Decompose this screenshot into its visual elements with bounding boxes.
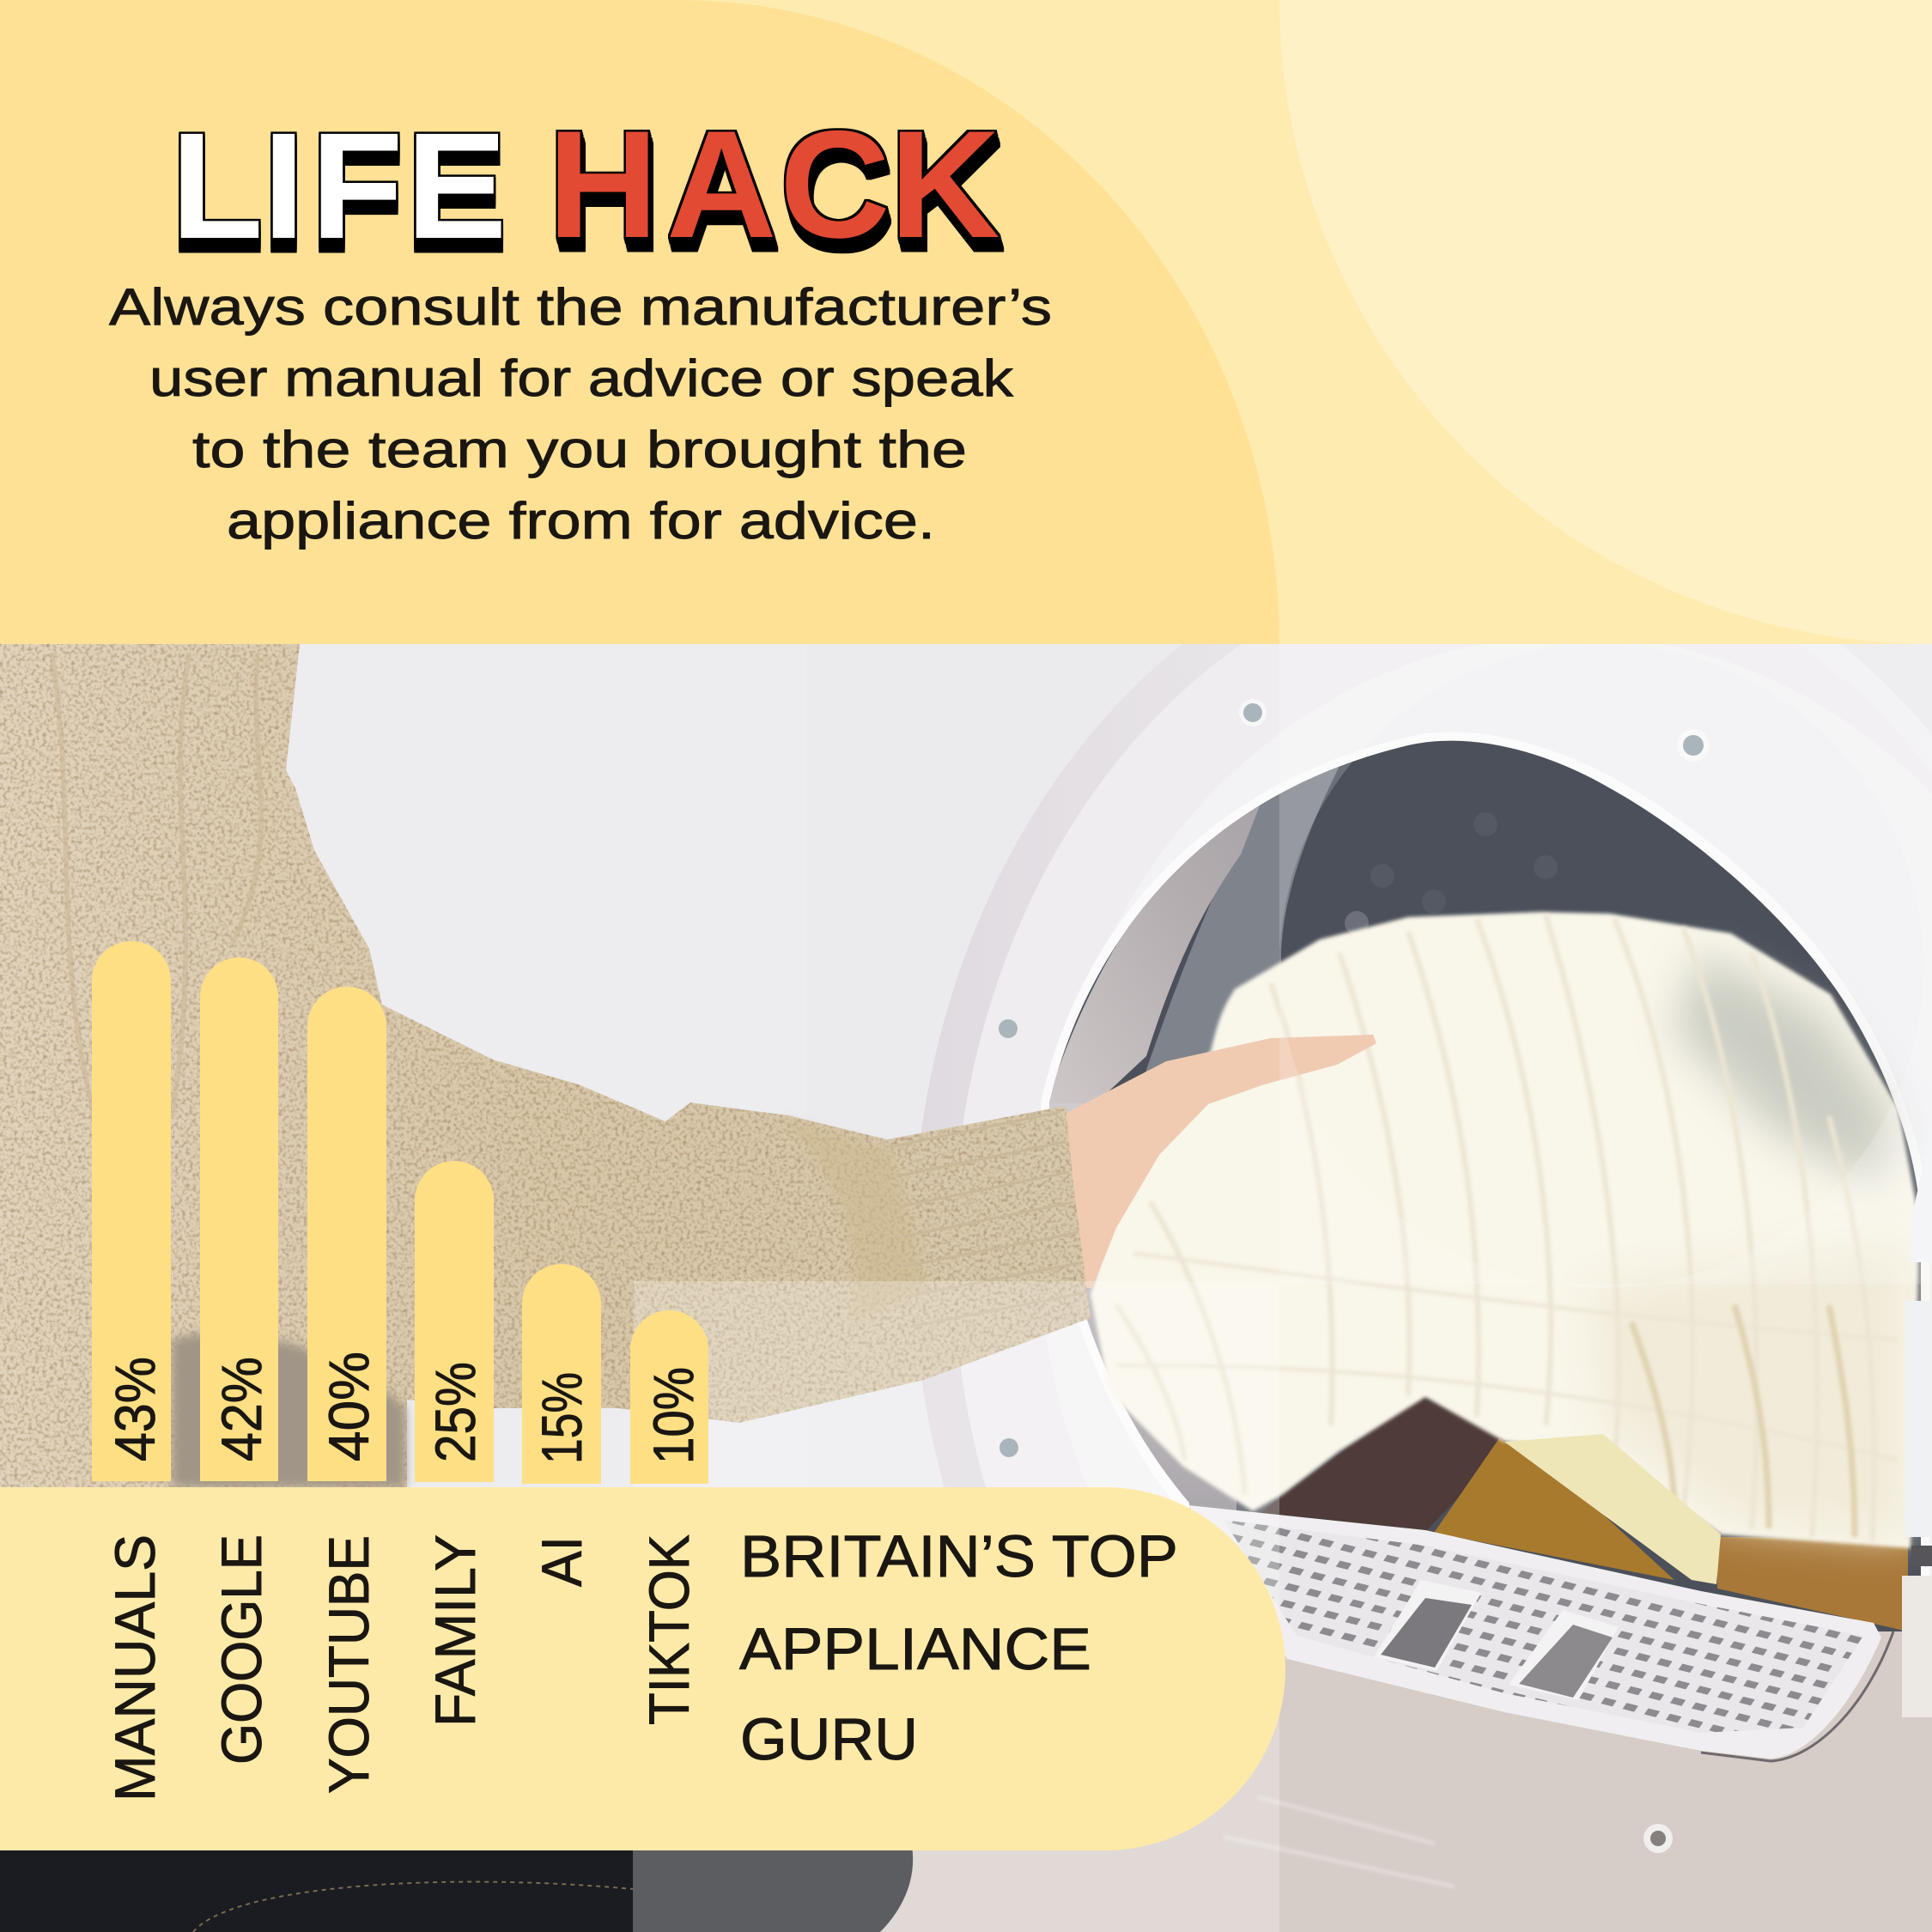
bar: youtube 40% xyxy=(307,987,386,1481)
heading: Britain's top appliance guru: APPLIANCE xyxy=(739,1616,1091,1682)
photo: pale yellow sleeve xyxy=(1504,1434,1721,1584)
title: LIFE HACK: HACK xyxy=(548,99,1000,270)
heading: Britain's top appliance guru: BRITAIN’S TOP xyxy=(740,1523,1178,1589)
text block: advice xyxy=(109,278,1052,550)
heading: Britain's top appliance guru xyxy=(739,1523,1178,1772)
photo: sweater sleeve and body xyxy=(0,644,1091,1487)
photo: drum interior xyxy=(1030,738,1921,1631)
bar: manuals 43% xyxy=(92,941,171,1481)
photo: hand loading a knitted blanket into a tumble dryer xyxy=(0,524,1932,1932)
bar labels xyxy=(103,1534,701,1801)
bar: ai 15%: 15% xyxy=(530,1372,593,1464)
bar labels: AI xyxy=(530,1536,593,1587)
title: LIFE HACK xyxy=(171,99,1000,270)
photo: dryer door ring xyxy=(920,656,1929,1717)
photo: door hinge at right edge xyxy=(1902,1125,1932,1717)
photo: panel highlights xyxy=(1224,1797,1455,1886)
photo: lint filter tray xyxy=(1188,1505,1893,1761)
photo: white washed panels over the photo xyxy=(634,1281,1279,1932)
bar: family 25% xyxy=(415,1161,494,1482)
text block: advice: to the team you brought the xyxy=(192,421,967,478)
bar: google 42%: 42% xyxy=(210,1357,273,1461)
bar: ai 15% xyxy=(522,1264,601,1484)
photo: floor and lower dryer panel xyxy=(633,1717,1932,1932)
icon: door screws xyxy=(999,699,1710,1853)
title: LIFE HACK: LIFE xyxy=(171,102,507,270)
bar: youtube 40%: 40% xyxy=(317,1352,380,1461)
photo: wall xyxy=(286,644,1932,1487)
bar chart: appliance advice sources xyxy=(92,941,708,1484)
panel: top yellow background xyxy=(0,0,1932,644)
photo: knitted blanket xyxy=(1091,912,1919,1548)
bar: tiktok 10% xyxy=(630,1310,708,1484)
bar labels: MANUALS xyxy=(103,1534,167,1801)
text block: advice: appliance from for advice. xyxy=(227,492,935,550)
bar labels: TIKTOK xyxy=(637,1534,701,1725)
photo: clothes under the blanket xyxy=(1254,1391,1908,1631)
bar labels: GOOGLE xyxy=(210,1534,273,1765)
bar labels: YOUTUBE xyxy=(317,1535,380,1794)
bar: tiktok 10%: 10% xyxy=(641,1367,705,1464)
bar: manuals 43%: 43% xyxy=(103,1357,167,1461)
bar: family 25%: 25% xyxy=(423,1362,487,1462)
heading: Britain's top appliance guru: GURU xyxy=(740,1706,918,1772)
photo: translucent circle overlay xyxy=(1279,644,1932,1288)
bar labels: FAMILY xyxy=(423,1534,487,1727)
text block: advice: Always consult the manufacturer’s xyxy=(109,278,1052,336)
photo: hand xyxy=(1052,1035,1376,1288)
panel: pale yellow pill behind labels xyxy=(0,1487,1285,1850)
photo: dark jeans beneath the pill xyxy=(0,1846,913,1932)
text block: advice: user manual for advice or speak xyxy=(149,349,1014,407)
bar: google 42% xyxy=(200,957,278,1481)
